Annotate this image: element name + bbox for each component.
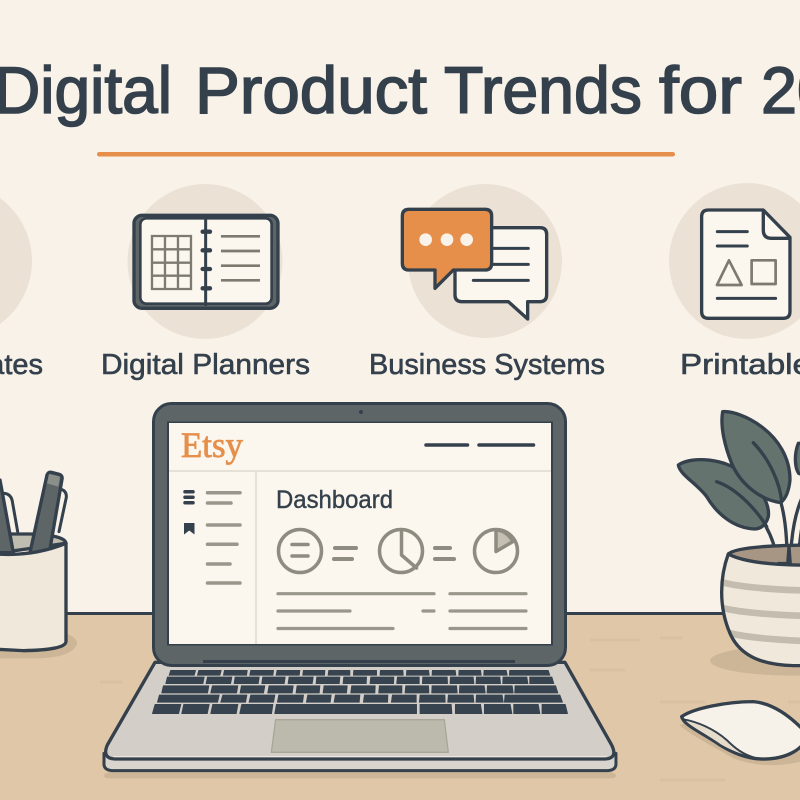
webcam bbox=[359, 410, 363, 414]
icon: open planner bbox=[134, 215, 278, 308]
icon circle: business bbox=[408, 184, 562, 338]
pot body bbox=[720, 545, 800, 666]
icon: document bbox=[702, 210, 790, 318]
trackpad bbox=[271, 720, 448, 752]
pen cup bbox=[0, 472, 77, 658]
icon circle: printables bbox=[669, 183, 800, 339]
screen bbox=[167, 422, 553, 646]
label: printables: Printable bbox=[680, 349, 800, 381]
leaves and stems bbox=[678, 412, 800, 563]
desk bbox=[0, 612, 800, 800]
keyboard bbox=[152, 670, 568, 714]
dashboard table lines bbox=[278, 594, 526, 628]
laptop base bbox=[104, 662, 616, 778]
title: Product bbox=[195, 53, 427, 127]
hinge bbox=[203, 660, 515, 663]
title underline bbox=[97, 152, 675, 156]
panel: printables bbox=[669, 183, 800, 381]
laptop bbox=[104, 404, 616, 778]
icon: chat bubbles bbox=[402, 209, 547, 319]
dashboard widgets bbox=[278, 530, 518, 572]
panel: digital planners bbox=[101, 184, 310, 381]
title: Trends bbox=[444, 53, 642, 127]
dashboard heading: Dashboard bbox=[276, 486, 393, 514]
laptop lid bbox=[154, 404, 566, 666]
etsy logo: Etsy bbox=[181, 425, 243, 465]
icon circle: templates bbox=[0, 183, 32, 339]
sidebar bbox=[184, 492, 240, 583]
label: business systems: Business Systems bbox=[369, 349, 605, 381]
header lines bbox=[426, 443, 534, 447]
title bbox=[0, 53, 800, 127]
mouse bbox=[679, 702, 800, 765]
panel: templates bbox=[0, 183, 43, 381]
label: digital planners: Digital Planners bbox=[101, 349, 310, 381]
icon circle: planners bbox=[128, 184, 282, 339]
title: for bbox=[659, 53, 742, 127]
panel: business systems bbox=[369, 184, 605, 381]
plant bbox=[678, 412, 800, 676]
pot shadow bbox=[710, 646, 800, 676]
